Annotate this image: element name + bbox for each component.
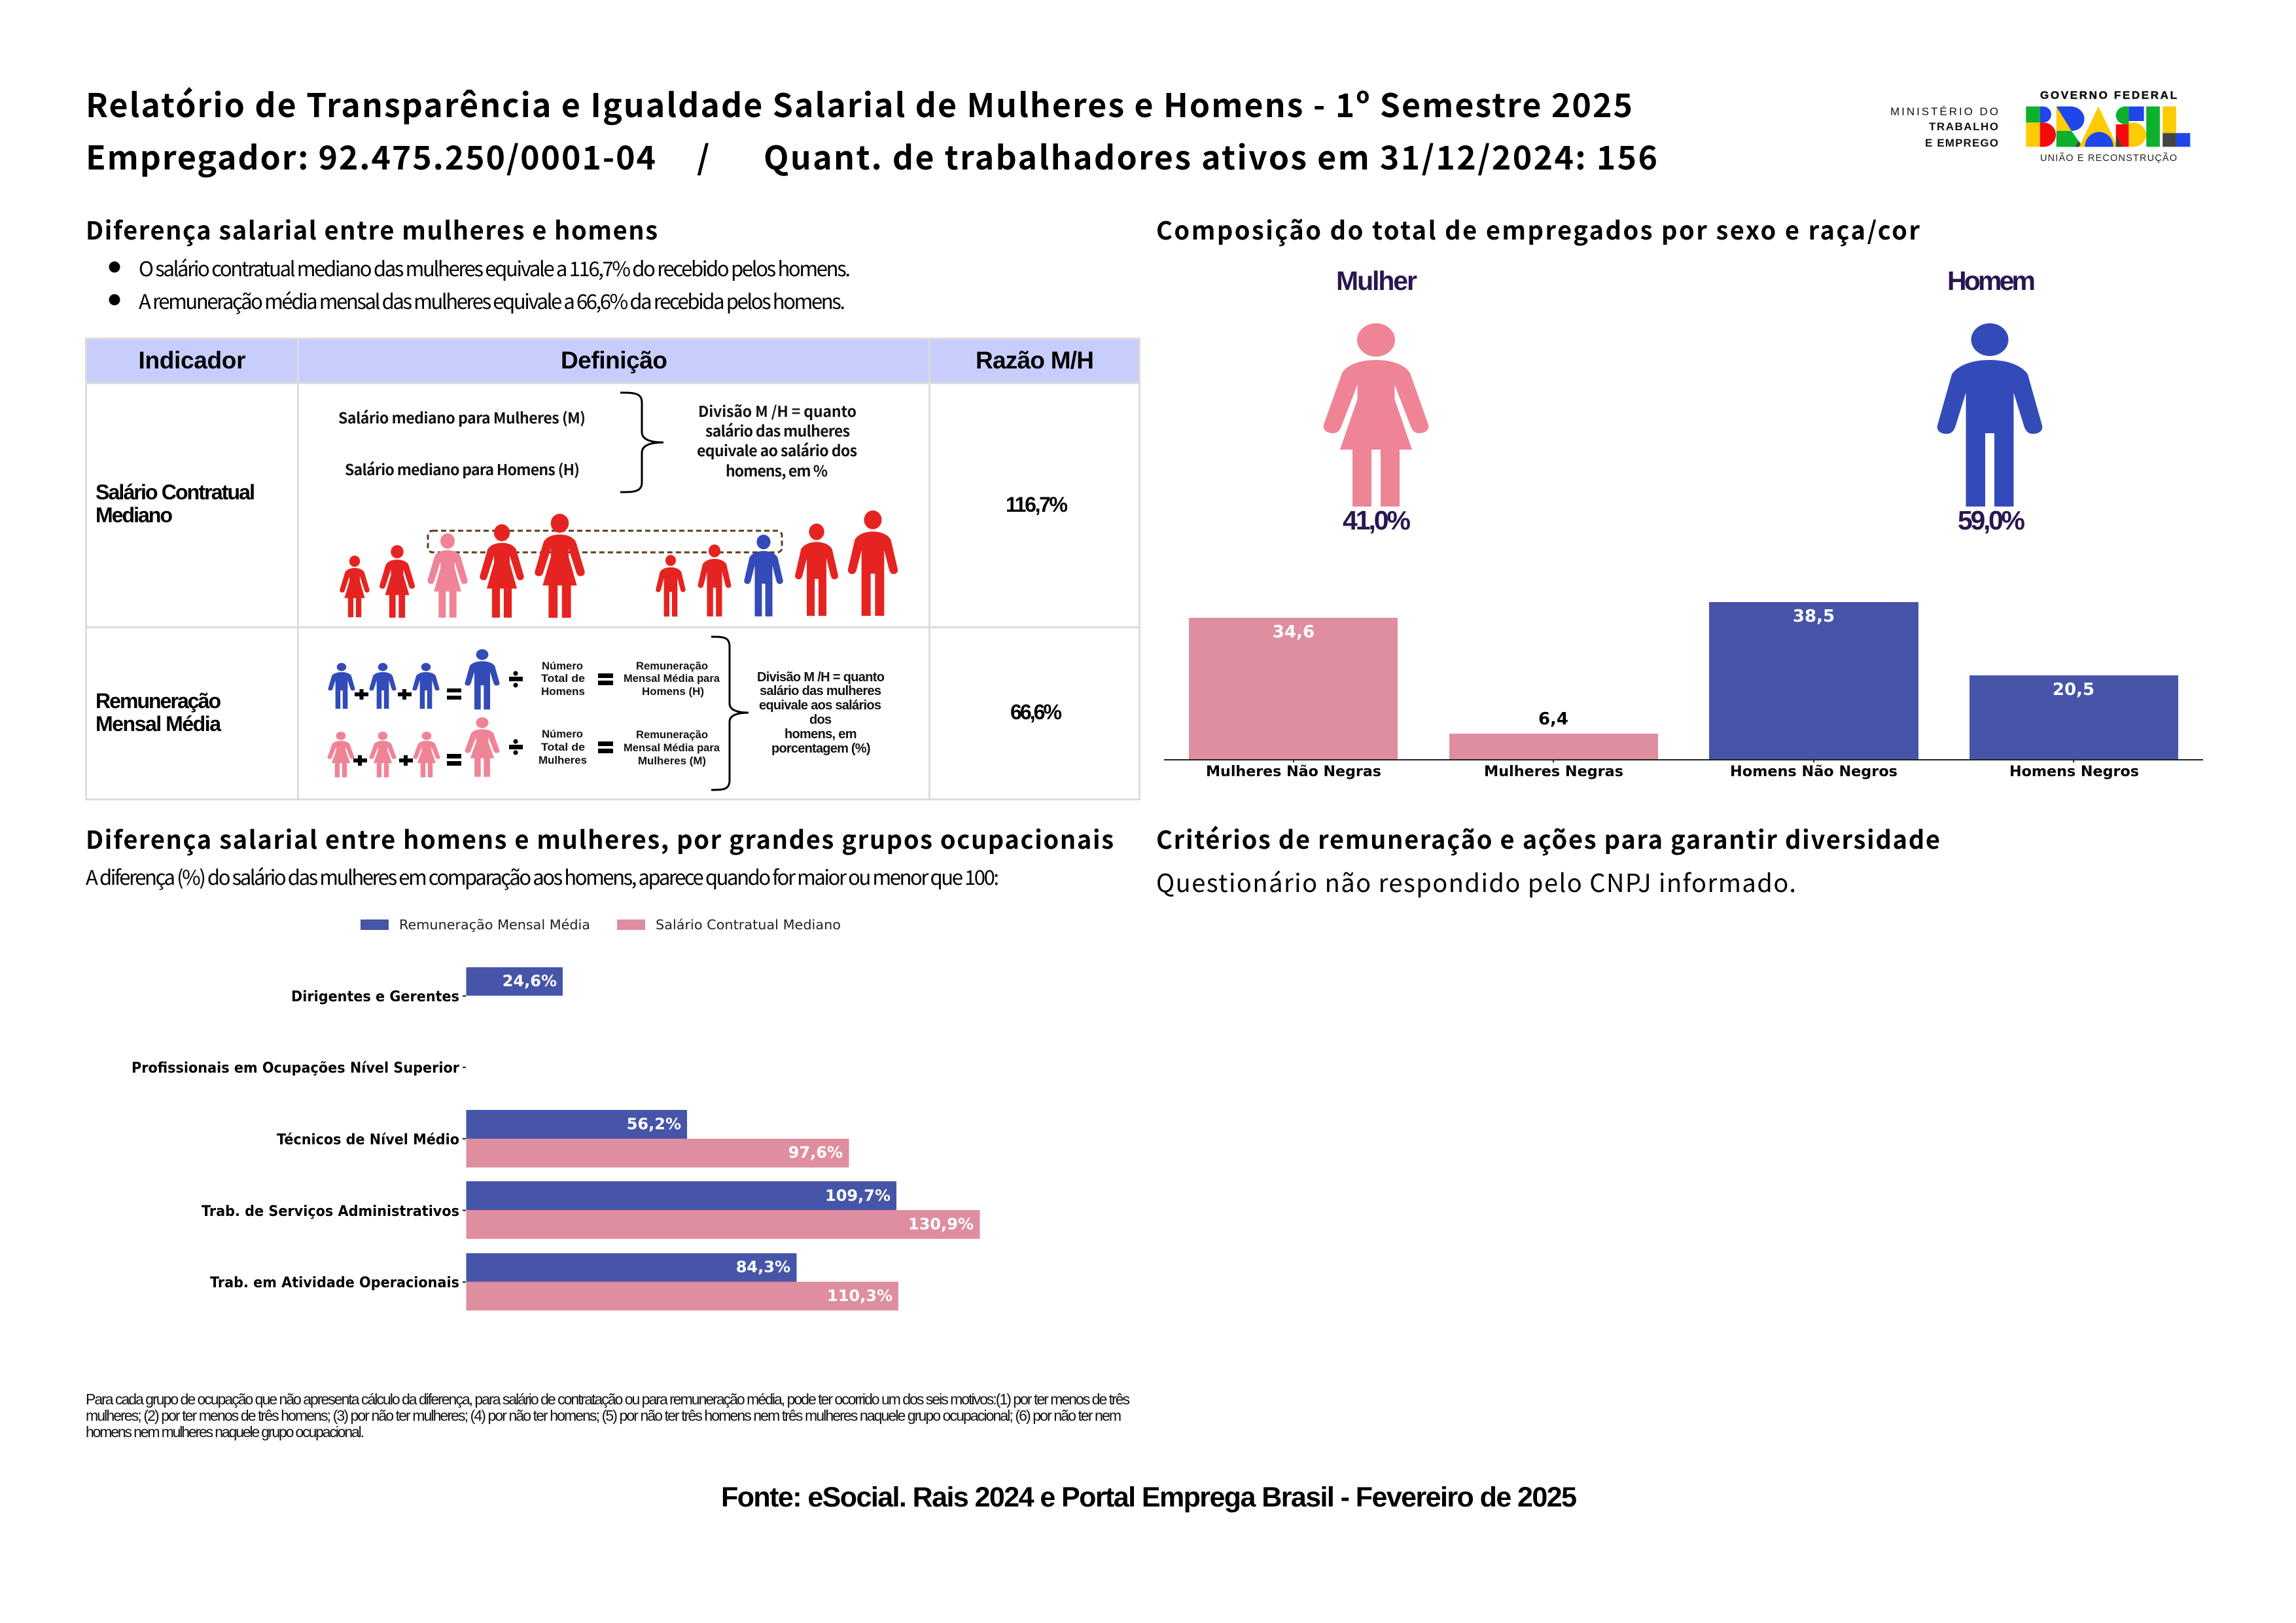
bar chart: grupos ocupacionais: 84,3% xyxy=(736,1258,790,1276)
median people illustration xyxy=(340,510,898,618)
women formula text: Mensal Média para xyxy=(624,741,720,754)
footnote xyxy=(86,1391,1130,1440)
row 2 definition text: Divisão M /H = quanto xyxy=(757,670,885,685)
table header: Definição xyxy=(561,347,667,374)
row 2 definition text: equivale aos salários xyxy=(759,698,881,713)
row 1 definition text: Divisão M /H = quanto xyxy=(698,399,857,421)
legend: Remuneração Mensal Média xyxy=(399,917,590,933)
men formula text: Remuneração xyxy=(636,660,708,672)
women formula text: Número xyxy=(542,728,583,740)
women formula icons xyxy=(327,717,613,777)
panel: man share: 59,0% xyxy=(1958,505,2025,535)
bar chart: grupos ocupacionais: Trab. de Serviços Administrativos xyxy=(202,1204,459,1220)
icon: brace row 1 xyxy=(620,393,663,492)
row 2 definition text: homens, em xyxy=(785,727,857,741)
bar chart: grupos ocupacionais: 24,6% xyxy=(503,972,557,990)
row 2 definition text: porcentagem (%) xyxy=(771,741,870,756)
women formula text xyxy=(539,728,720,767)
bar chart: sexo e raça/cor: Mulheres Negras xyxy=(1484,764,1623,780)
panel: woman share xyxy=(1324,266,1428,535)
bar chart: sexo e raça/cor: Mulheres Não Negras xyxy=(1206,764,1381,780)
ministry name: E EMPREGO xyxy=(1925,137,1998,149)
legend xyxy=(361,917,841,933)
row 1 ratio: 116,7% xyxy=(1006,493,1068,516)
row 2 ratio: 66,6% xyxy=(1010,700,1062,724)
logo: ministério e governo federal xyxy=(1890,89,2190,164)
bullet list: O salário contratual mediano das mulheres equivale a 116,7% do recebido pelos homens. xyxy=(139,253,851,282)
row 2 definition text: salário das mulheres xyxy=(760,684,881,698)
subheading: grupos ocupacionais: A diferença (%) do salário das mulheres em comparação aos homens, aparece quando for maior ou menor que 100: xyxy=(86,861,999,891)
bar chart: grupos ocupacionais: Técnicos de Nível Médio xyxy=(277,1132,459,1148)
row 1 definition text: homens, em % xyxy=(726,459,828,481)
panel: woman share: 41,0% xyxy=(1343,505,1411,535)
bar chart: sexo e raça/cor: 6,4 xyxy=(1538,709,1568,729)
bar chart: grupos ocupacionais: 56,2% xyxy=(627,1115,681,1133)
men formula icons xyxy=(328,649,613,709)
men formula text xyxy=(541,660,720,698)
bar chart: grupos ocupacionais: 109,7% xyxy=(825,1186,891,1205)
icon: brasil wordmark xyxy=(2026,107,2190,147)
row 2 label: Remuneração xyxy=(96,689,221,713)
heading: diferença salarial: Diferença salarial entre mulheres e homens xyxy=(86,211,658,247)
row 1 label: Mediano xyxy=(96,503,173,527)
ministry name: MINISTÉRIO DO xyxy=(1890,105,1998,118)
title xyxy=(86,80,1657,179)
row 2 label: Mensal Média xyxy=(96,712,221,736)
table header: Indicador xyxy=(139,347,246,374)
row 1 definition text: Salário mediano para Homens (H) xyxy=(345,457,580,480)
bullet list xyxy=(109,253,851,315)
men formula text: Total de xyxy=(541,672,585,685)
table header xyxy=(86,339,1139,383)
men formula text: Homens (H) xyxy=(642,685,704,698)
panel: man share: Homem xyxy=(1947,266,2036,296)
icon: woman xyxy=(1324,323,1428,507)
bar chart: grupos ocupacionais: Profissionais em Ocupações Nível Superior xyxy=(132,1060,459,1077)
women formula text: Total de xyxy=(541,741,585,753)
row 2 label xyxy=(96,689,221,736)
bar chart: grupos ocupacionais: Trab. em Atividade Operacionais xyxy=(210,1275,459,1291)
bar chart: sexo e raça/cor: 38,5 xyxy=(1793,607,1835,626)
row 1 definition text: equivale ao salário dos xyxy=(697,438,857,461)
row 1 definition text: Salário mediano para Mulheres (M) xyxy=(338,406,586,428)
women formula text: Remuneração xyxy=(636,728,708,741)
legend: Salário Contratual Mediano xyxy=(656,917,841,933)
row 2 definition text xyxy=(757,670,885,756)
text: questionário: Questionário não respondido pelo CNPJ informado. xyxy=(1156,863,1796,899)
title: Empregador: 92.475.250/0001-04 xyxy=(86,132,656,179)
footnote: homens nem mulheres naquele grupo ocupacional. xyxy=(86,1423,364,1440)
row 1 label: Salário Contratual xyxy=(96,480,255,504)
row 1 definition text xyxy=(338,399,857,481)
panel: indicators table xyxy=(85,338,1140,800)
footnote: Para cada grupo de ocupação que não apresenta cálculo da diferença, para salário de contratação ou para remuneração média, pode ter ocorrido um dos seis motivos:(1) por ter menos de três xyxy=(86,1391,1130,1408)
title: / xyxy=(697,132,709,179)
women formula text: Mulheres (M) xyxy=(638,755,706,767)
bar chart: grupos ocupacionais: 110,3% xyxy=(827,1287,892,1305)
bar chart: sexo e raça/cor: Homens Não Negros xyxy=(1730,764,1898,780)
row 1 definition text: salário das mulheres xyxy=(705,419,850,441)
bar chart: grupos ocupacionais: 97,6% xyxy=(788,1143,843,1162)
bar chart: grupos ocupacionais: Dirigentes e Gerentes xyxy=(291,989,459,1005)
bullet list: A remuneração média mensal das mulheres equivale a 66,6% da recebida pelos homens. xyxy=(139,285,845,315)
bar chart: sexo e raça/cor: 34,6 xyxy=(1273,622,1315,642)
men formula text: Número xyxy=(542,660,583,672)
heading: composição: Composição do total de empregados por sexo e raça/cor xyxy=(1156,211,1920,247)
title: Quant. de trabalhadores ativos em 31/12/2024: 156 xyxy=(764,132,1657,179)
panel: man share xyxy=(1937,266,2042,535)
row 2 definition text: dos xyxy=(809,713,832,727)
ministry name: TRABALHO xyxy=(1929,120,1998,133)
união e reconstrução label: UNIÃO E RECONSTRUÇÃO xyxy=(2040,152,2177,164)
bar chart: sexo e raça/cor: 20,5 xyxy=(2053,680,2094,700)
icon: man xyxy=(1937,323,2042,507)
row 1 label xyxy=(96,480,255,527)
bar chart: sexo e raça/cor xyxy=(1164,602,2203,780)
men formula text: Mensal Média para xyxy=(624,672,720,685)
icon: brace row 2 xyxy=(711,637,749,790)
title: Relatório de Transparência e Igualdade Salarial de Mulheres e Homens - 1º Semestre 2025 xyxy=(86,80,1633,127)
men formula text: Homens xyxy=(541,685,585,698)
panel: woman share: Mulher xyxy=(1336,266,1417,296)
heading: critérios: Critérios de remuneração e ações para garantir diversidade xyxy=(1156,820,1940,856)
governo federal label: GOVERNO FEDERAL xyxy=(2040,89,2177,101)
footnote: mulheres; (2) por ter menos de três homens; (3) por não ter mulheres; (4) por não ter homens; (5) por não ter três homens nem três mulheres naquele grupo ocupacional; (6) por não ter nem xyxy=(86,1407,1122,1424)
women formula text: Mulheres xyxy=(539,754,587,766)
source line: Fonte: eSocial. Rais 2024 e Portal Emprega Brasil - Fevereiro de 2025 xyxy=(721,1482,1577,1513)
bar chart: grupos ocupacionais: 130,9% xyxy=(908,1215,974,1233)
ministry name xyxy=(1890,105,1998,149)
bar chart: sexo e raça/cor: Homens Negros xyxy=(2009,764,2139,780)
heading: grupos ocupacionais: Diferença salarial entre homens e mulheres, por grandes grupos ocupacionais xyxy=(86,820,1114,856)
bar chart: grupos ocupacionais xyxy=(132,967,980,1310)
table header: Razão M/H xyxy=(976,347,1094,374)
